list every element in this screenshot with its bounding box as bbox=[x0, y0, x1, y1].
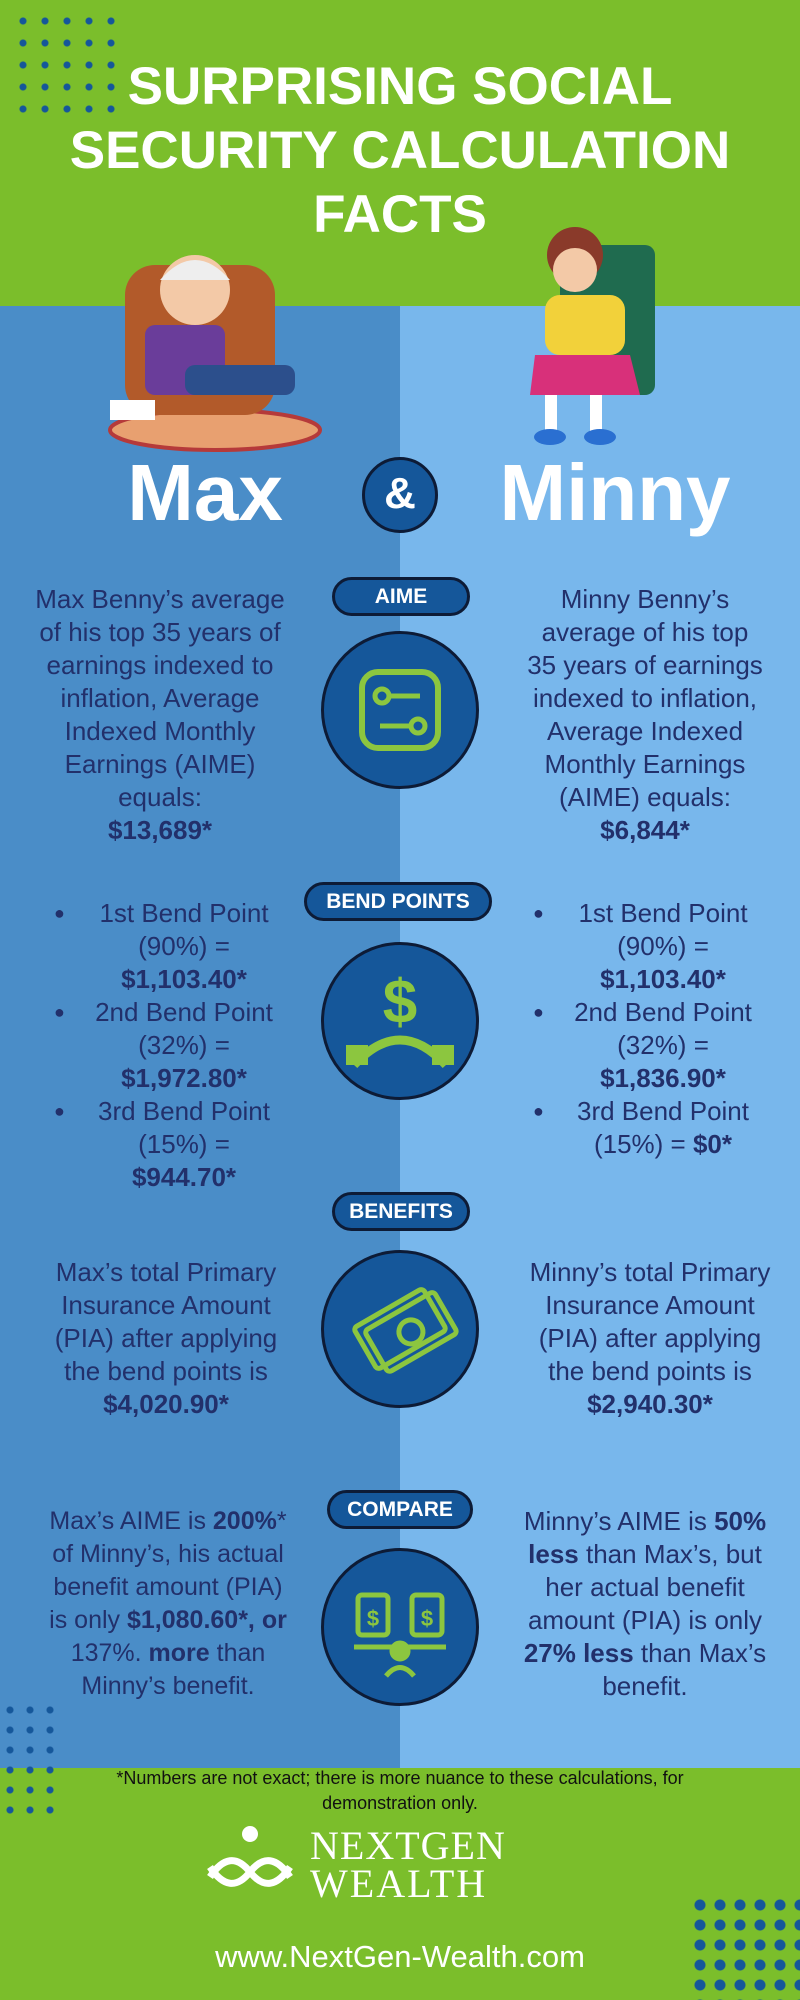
text: Max bend points: (15%) = bbox=[138, 1129, 230, 1159]
ampersand circle: & bbox=[384, 469, 416, 518]
right column background bbox=[400, 306, 800, 1768]
ampersand circle bbox=[362, 457, 438, 533]
text: Minny benefits: the bend points is bbox=[548, 1356, 752, 1386]
pill: AIME bbox=[332, 577, 470, 616]
text: Max bend points: 2nd Bend Point bbox=[95, 997, 273, 1027]
text: Max compare: 137%. more than bbox=[71, 1639, 265, 1667]
text: Max bend points: $944.70* bbox=[132, 1162, 236, 1192]
logo: NextGen Wealth: NEXTGEN bbox=[310, 1823, 506, 1868]
text: Minny benefits: Minny’s total Primary bbox=[530, 1257, 770, 1287]
pill: BEND POINTS: BEND POINTS bbox=[326, 890, 470, 913]
icon: money bbox=[321, 1250, 479, 1408]
text: Minny bend points: ● bbox=[533, 903, 544, 923]
text: Minny bend points: (90%) = bbox=[617, 931, 709, 961]
text: Minny bend points: $1,836.90* bbox=[600, 1063, 726, 1093]
icon: scale with price tags: $ bbox=[367, 1606, 379, 1631]
text: Minny benefits: (PIA) after applying bbox=[539, 1323, 761, 1353]
text: Max compare bbox=[49, 1507, 287, 1700]
text: Max bend points: $1,972.80* bbox=[121, 1063, 247, 1093]
text: Minny compare: 27% less than Max’s bbox=[524, 1638, 766, 1668]
text: Max bend points: 1st Bend Point bbox=[99, 898, 269, 928]
text: Minny bend points: 2nd Bend Point bbox=[574, 997, 752, 1027]
text: Minny AIME: Minny Benny’s bbox=[561, 584, 729, 614]
pill: COMPARE: COMPARE bbox=[347, 1498, 453, 1521]
icon: AIME circuit bbox=[321, 631, 479, 789]
text: Max benefits: (PIA) after applying bbox=[55, 1323, 277, 1353]
icon: dollar bend bbox=[321, 942, 479, 1100]
text: Max AIME: Max Benny’s average bbox=[35, 584, 285, 614]
text: Max AIME: Indexed Monthly bbox=[65, 716, 255, 746]
name: Max: Max bbox=[127, 448, 283, 537]
decorative dots top left bbox=[12, 10, 122, 120]
text: Max benefits bbox=[55, 1257, 277, 1419]
pill: BENEFITS: BENEFITS bbox=[349, 1200, 453, 1223]
title: SURPRISING SOCIAL bbox=[128, 57, 672, 116]
text: Max compare: Max’s AIME is 200%* bbox=[49, 1507, 287, 1535]
text: Max compare: is only $1,080.60*, or bbox=[49, 1606, 287, 1634]
icon: scale with price tags bbox=[321, 1548, 479, 1706]
left column background bbox=[0, 306, 400, 1768]
text: Max bend points bbox=[54, 898, 273, 1192]
website url: www.NextGen-Wealth.com bbox=[215, 1939, 585, 1974]
text: Max AIME: $13,689* bbox=[108, 815, 212, 845]
text: Minny compare: benefit. bbox=[602, 1671, 688, 1701]
text: Minny bend points: ● bbox=[533, 1002, 544, 1022]
icon: dollar bend: $ bbox=[383, 968, 417, 1037]
title: SECURITY CALCULATION bbox=[70, 121, 730, 180]
decorative dots bottom right bbox=[690, 1895, 800, 2000]
text: Minny AIME: (AIME) equals: bbox=[559, 782, 731, 812]
text: Minny benefits: Insurance Amount bbox=[545, 1290, 755, 1320]
text: Minny compare: amount (PIA) is only bbox=[528, 1605, 762, 1635]
illustration: Minny in chair bbox=[530, 227, 655, 445]
text: Minny bend points: (15%) = $0* bbox=[594, 1129, 732, 1159]
text: Minny AIME: Monthly Earnings bbox=[545, 749, 745, 779]
text: Max bend points: ● bbox=[54, 1101, 65, 1121]
text: Max bend points: ● bbox=[54, 1002, 65, 1022]
text: Max compare: of Minny’s, his actual bbox=[52, 1540, 284, 1568]
text: Max bend points: 3rd Bend Point bbox=[98, 1096, 270, 1126]
text: Max bend points: $1,103.40* bbox=[121, 964, 247, 994]
text: Minny compare: Minny’s AIME is 50% bbox=[524, 1506, 766, 1536]
logo: NextGen Wealth: WEALTH bbox=[310, 1861, 487, 1906]
text: Max compare: Minny’s benefit. bbox=[81, 1672, 255, 1700]
icon: scale with price tags: $ bbox=[421, 1606, 433, 1631]
pill: BEND POINTS bbox=[304, 882, 492, 921]
text: Minny bend points: 1st Bend Point bbox=[578, 898, 748, 928]
text: Max benefits: the bend points is bbox=[64, 1356, 268, 1386]
text: Max AIME: inflation, Average bbox=[60, 683, 260, 713]
text: Minny compare: less than Max’s, but bbox=[528, 1539, 762, 1569]
text: Max AIME: of his top 35 years of bbox=[39, 617, 281, 647]
text: Max AIME: equals: bbox=[118, 782, 202, 812]
pill: AIME: AIME bbox=[375, 585, 427, 608]
illustration: Max in armchair bbox=[108, 255, 322, 452]
text: Minny benefits bbox=[530, 1257, 770, 1419]
footnote: *Numbers are not exact; there is more nuance to these calculations, for demonstration only. bbox=[116, 1768, 684, 1813]
text: Minny AIME: average of his top bbox=[542, 617, 748, 647]
text: Max benefits: Max’s total Primary bbox=[56, 1257, 276, 1287]
text: Max compare: benefit amount (PIA) bbox=[53, 1573, 283, 1601]
text: Max AIME: earnings indexed to bbox=[47, 650, 273, 680]
pill: BENEFITS bbox=[332, 1192, 470, 1231]
text: Minny bend points bbox=[533, 898, 752, 1159]
name: Minny: Minny bbox=[499, 448, 731, 537]
decorative dots bottom left bbox=[0, 1700, 60, 1820]
text: Minny AIME: indexed to inflation, bbox=[533, 683, 757, 713]
text: Max bend points: (32%) = bbox=[138, 1030, 230, 1060]
title bbox=[70, 57, 730, 244]
text: Minny compare: her actual benefit bbox=[545, 1572, 745, 1602]
title: FACTS bbox=[313, 185, 487, 244]
pill: COMPARE bbox=[327, 1490, 473, 1529]
text: Minny bend points: 3rd Bend Point bbox=[577, 1096, 749, 1126]
text: Minny benefits: $2,940.30* bbox=[587, 1389, 713, 1419]
text: Minny bend points: ● bbox=[533, 1101, 544, 1121]
text: Minny AIME: 35 years of earnings bbox=[527, 650, 763, 680]
text: Minny bend points: (32%) = bbox=[617, 1030, 709, 1060]
logo: NextGen Wealth bbox=[207, 1823, 506, 1906]
text: Max bend points: (90%) = bbox=[138, 931, 230, 961]
text: Minny AIME: Average Indexed bbox=[547, 716, 743, 746]
text: Max benefits: $4,020.90* bbox=[103, 1389, 229, 1419]
text: Minny AIME bbox=[527, 584, 763, 845]
text: Max AIME: Earnings (AIME) bbox=[65, 749, 255, 779]
text: Minny AIME: $6,844* bbox=[600, 815, 690, 845]
text: Minny bend points: $1,103.40* bbox=[600, 964, 726, 994]
text: Max benefits: Insurance Amount bbox=[61, 1290, 271, 1320]
text: Minny compare bbox=[524, 1506, 766, 1701]
text: Max bend points: ● bbox=[54, 903, 65, 923]
text: Max AIME bbox=[35, 584, 285, 845]
